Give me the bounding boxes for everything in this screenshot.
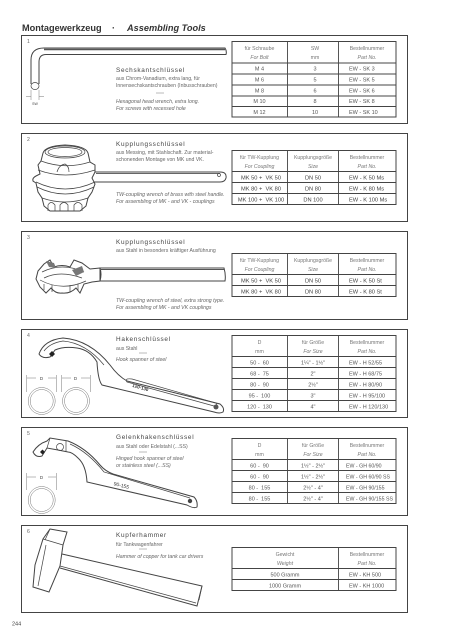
table: For Coupling [245,164,274,170]
table: Bestellnummer [350,340,385,346]
table: EW - K 50 Ms [349,176,384,182]
English description: Hammer of copper for tank car drivers [116,554,204,560]
icon: hex wrench [26,48,226,106]
table: 3 [313,66,317,72]
table: M 4 [255,66,264,72]
English description: TW-coupling wrench of brass with steel handle. [116,192,225,198]
table: EW - SK 3 [349,66,375,72]
table: M 12 [253,110,266,116]
German description: für Tankwagenfahrer [116,542,163,548]
table: Bestellnummer [350,155,385,161]
German description: aus Messing, mit Stahlschaft. Zur material- [116,150,214,156]
table: For Size [303,349,323,355]
table: Bestellnummer [350,258,385,264]
icon: D dimension ring: D [40,475,44,480]
icon: hook spanner: 120-130 [132,383,150,392]
table: MK 50 + VK 50 [241,278,281,284]
table: MK 100 + VK 100 [238,198,284,204]
table: Part No. [357,267,377,273]
panel: coupling wrench brass: 2 [27,137,30,143]
English description: For assembling of MK - and VK couplings [116,305,212,311]
table: mm [255,452,264,458]
table: 50 - 60 [250,360,269,366]
German description: Innensechskantschrauben (Inbusschrauben) [116,83,218,89]
panel: hinged hook spanner: 5 [27,431,30,437]
icon: hinged spanner [33,438,197,508]
table: 8 [313,99,317,105]
icon: hinged spanner: 90-155 [113,481,130,491]
panel: hinged hook spanner [22,428,408,516]
table: 3" [310,394,316,400]
panel: copper hammer: 6 [27,529,30,535]
icon: hook spanner [39,338,224,413]
table: DN 50 [305,176,321,182]
table [232,42,396,117]
table: 80 - 155 [249,496,270,502]
table: Part No. [357,55,377,61]
table: 2½" [308,382,318,388]
table: DN 100 [303,198,323,204]
table: Weight [277,561,294,567]
title [22,23,206,33]
table: 68 - 75 [250,372,269,378]
German description [116,150,214,163]
English description [116,298,224,311]
heading: Sechskantschlüssel [116,67,185,74]
table: 95 - 100 [249,394,270,400]
table: MK 80 + VK 80 [241,186,281,192]
icon: hex wrench: SW [32,102,39,106]
German description: aus Chrom-Vanadium, extra lang, für [116,76,200,82]
icon: D dimension rings: D [40,376,44,381]
table: M 8 [255,88,264,94]
table: Bestellnummer [350,552,385,558]
table: EW - K 100 Ms [349,198,387,204]
English description: Hook spanner of steel [116,357,167,363]
table: M 6 [255,78,264,84]
table: Gewicht [276,552,295,558]
heading: Kupferhammer [116,532,167,539]
table: EW - H 120/130 [349,404,388,410]
table: EW - GH 90/155 SS [346,496,393,502]
panel: coupling wrench brass [22,134,408,222]
title: · [112,23,115,33]
icon: D dimension ring [27,473,57,514]
page number: 244 [12,622,21,628]
table: 10 [312,110,318,116]
table: Size [308,267,318,273]
table: für Größe [302,443,324,449]
table: Bestellnummer [350,443,385,449]
panel: hexagon wrench: 1 [27,39,30,45]
table: EW - H 95/100 [349,394,385,400]
table: 1¼" - 1½" [301,360,325,366]
table: EW - H 80/90 [349,382,382,388]
table: Part No. [357,452,377,458]
table: für Schraube [245,46,274,52]
table: EW - H 68/75 [349,372,382,378]
heading: Kupplungsschlüssel [116,239,185,246]
table: For Coupling [245,267,274,273]
panel: hook spanner [22,330,408,418]
table: 500 Gramm [270,572,300,578]
table: EW - KH 1000 [349,584,384,590]
table: DN 50 [305,278,321,284]
table: 80 - 155 [249,486,270,492]
table: 4" [310,404,316,410]
table: EW - KH 500 [349,572,381,578]
table: mm [311,55,319,61]
table: SW [311,46,319,52]
icon: hammer [33,529,202,606]
panel: hook spanner: 4 [27,333,30,339]
table: 120 - 130 [247,404,272,410]
table: Kupplungsgröße [294,258,332,264]
table [232,548,396,590]
icon: steel wrench [36,260,225,293]
German description: schonenden Montage von MK und VK. [116,157,204,163]
English description [116,192,225,205]
table: 80 - 90 [250,382,269,388]
English description: Hexagonal head wrench, extra long. [116,99,199,105]
table: Kupplungsgröße [294,155,332,161]
table: 60 - 90 [250,464,269,470]
table: DN 80 [305,290,321,296]
table: EW - GH 90/155 [346,486,385,492]
table: Part No. [357,561,377,567]
table: EW - GH 60/90 [346,464,382,470]
table: 60 - 90 [250,474,269,480]
table: 1000 Gramm [269,584,301,590]
table: For Size [303,452,323,458]
panel: coupling wrench steel [22,232,408,320]
table: EW - SK 6 [349,88,375,94]
table: M 10 [253,99,266,105]
title: Montagewerkzeug [22,23,102,33]
table: mm [255,349,264,355]
table: für TW-Kupplung [240,258,279,264]
table: DN 80 [305,186,321,192]
panel: coupling wrench steel: 3 [27,235,30,241]
table: 1½" - 2½" [301,474,325,480]
German description: aus Stahl [116,346,137,352]
table: 2½" - 4" [303,496,323,502]
English description: TW-coupling wrench of steel, extra strong type. [116,298,224,304]
table: EW - SK 5 [349,78,375,84]
title: Assembling Tools [126,23,206,33]
English description: For screws with recessed hole [116,106,186,112]
panel: copper hammer [22,526,408,612]
icon: D dimension rings [27,375,91,414]
table: für Größe [302,340,324,346]
table: EW - H 52/55 [349,360,382,366]
table: EW - SK 8 [349,99,375,105]
table: EW - SK 10 [349,110,378,116]
English description: Hinged hook spanner of steel [116,456,184,462]
table: 1½" - 2½" [301,462,325,470]
table: D [258,443,262,449]
table [232,336,396,412]
English description [116,456,184,469]
table: EW - GH 60/90 SS [346,474,391,480]
table: D [258,340,262,346]
table: 6 [313,88,317,94]
table [232,254,396,296]
German description [116,76,218,89]
German description: aus Stahl in besonders kräftiger Ausführung [116,248,216,254]
table: For Bolt [250,55,269,61]
table: 2½" - 4" [303,484,323,492]
table: für TW-Kupplung [240,155,279,161]
table: MK 50 + VK 50 [241,176,281,182]
panel: hexagon wrench [22,36,408,124]
table: EW - K 80 Ms [349,186,384,192]
heading: Gelenkhakenschlüssel [116,434,194,441]
heading: Kupplungsschlüssel [116,141,185,148]
icon: D dimension rings: D [74,376,78,381]
table: MK 80 + VK 80 [241,290,281,296]
icon: coupling wrench [33,145,226,211]
table: EW - K 80 St [349,290,382,296]
English description: or stainless steel (...SS) [116,463,171,469]
table: Part No. [357,349,377,355]
table: 2" [310,372,316,378]
table: EW - K 50 St [349,278,382,284]
English description [116,99,199,112]
table [232,438,396,504]
German description: aus Stahl oder Edelstahl (...SS) [116,444,188,450]
table: Size [308,164,318,170]
table: Part No. [357,164,377,170]
table: Bestellnummer [350,46,385,52]
English description: For assembling of MK - and VK - couplings [116,199,215,205]
heading: Hakenschlüssel [116,336,171,343]
table: 5 [313,78,317,84]
table [232,150,396,204]
